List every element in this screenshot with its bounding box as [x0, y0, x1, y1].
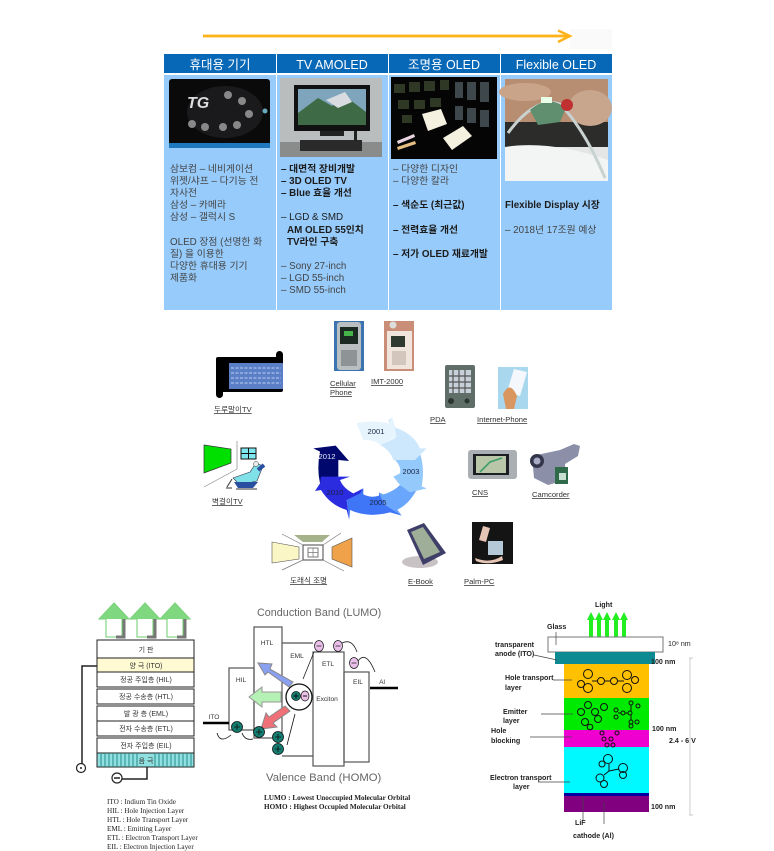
text: portable devices description: 질) 을 이용한 — [170, 248, 224, 260]
icon: light arrows — [587, 612, 628, 637]
labels: layer names: layer — [505, 684, 522, 692]
text: TV AMOLED description: – LGD 55-inch — [281, 273, 344, 284]
chart: band boxes — [203, 627, 398, 766]
legend: layer abbreviations: ITO : Indium Tin Oxide — [107, 798, 176, 806]
label: cycle years: 2003 — [403, 467, 419, 476]
text: portable devices description: 제품화 — [170, 272, 197, 284]
text: lighting OLED description: – 전력효율 개선 — [393, 223, 458, 236]
column: lighting OLED: 조명용 OLED — [408, 58, 480, 72]
icon: electron transport molecule — [596, 754, 628, 788]
photo: car navigation system — [468, 450, 517, 497]
icon: wall-mounted TV: 벽걸이TV — [212, 496, 244, 506]
text: TV AMOLED description: – SMD 55-inch — [281, 285, 346, 296]
text: TV AMOLED description: – Sony 27-inch — [281, 261, 346, 272]
photo: cellular phone: Cellular — [330, 379, 356, 388]
photo: e-book: E-Book — [408, 577, 433, 586]
image: tablet device: TG — [187, 95, 209, 112]
icon: leader lines — [530, 632, 693, 824]
text: TV AMOLED description: – Blue 효율 개선 — [281, 186, 352, 199]
chart: device layers: 전자 수송층 (ETL) — [119, 724, 173, 733]
chart: device layers: 양 극 (ITO) — [130, 662, 162, 670]
label: cycle years: 2012 — [319, 452, 335, 461]
text: lighting OLED description: – 다양한 디자인 — [393, 163, 458, 175]
text: band labels: HTL — [261, 640, 274, 647]
layer: aluminum cathode — [564, 796, 649, 812]
photo: PDA: PDA — [430, 415, 447, 424]
chart: circular year arrows — [313, 418, 427, 520]
arrow: 2002 segment — [380, 418, 427, 460]
chart: device layers: 음 극 — [139, 757, 154, 765]
panel: OLED application table — [164, 54, 612, 310]
photo: IMT-2000 phone — [371, 321, 414, 386]
text: band labels: Al — [379, 679, 385, 686]
arrow: 2003 segment — [393, 453, 427, 492]
photo: PDA — [430, 365, 475, 424]
text: lighting OLED description: – 색순도 (최근값) — [393, 198, 464, 211]
layer: LiF — [564, 793, 649, 796]
photo: palm PC — [464, 522, 513, 586]
photo: palm PC: Palm-PC — [464, 577, 495, 586]
text: band labels: ETL — [322, 661, 334, 668]
legend: layer abbreviations: EIL : Electron Injection Layer — [107, 843, 194, 851]
diagram: OLED layer stack — [76, 603, 200, 851]
labels: layer names: layer — [513, 783, 530, 791]
label: cycle years: 2005 — [370, 498, 386, 507]
text: lighting OLED description — [393, 163, 488, 260]
text: band labels: EIL — [353, 679, 363, 686]
heading: conduction band: Conduction Band (LUMO) — [257, 607, 381, 619]
diagram: OLED roadmap cycle — [204, 321, 580, 586]
chart: device layers: 기 판 — [139, 645, 154, 654]
photo: internet phone: Internet-Phone — [477, 415, 527, 424]
icon: anode wire and terminal — [76, 666, 97, 772]
layer: ITO anode — [555, 652, 655, 664]
legend: layer abbreviations: ETL : Electron Transport Layer — [107, 834, 198, 842]
icon: hole blocking molecule — [600, 731, 619, 747]
photo: camcorder: Camcorder — [532, 490, 570, 499]
photo: cellular phone: Phone — [330, 388, 352, 397]
text: band labels: Exciton — [316, 696, 338, 703]
chart: device layers: 정공 주입층 (HIL) — [120, 675, 172, 684]
legend: orbital abbreviations: HOMO : Highest Occupied Molecular Orbital — [264, 803, 406, 811]
layer: emitter — [564, 698, 649, 730]
photo: camcorder — [530, 444, 580, 499]
photo: e-book — [402, 523, 446, 586]
chart: device layers: 정공 수송층 (HTL) — [119, 692, 173, 701]
labels: layer names: blocking — [491, 737, 520, 745]
chart: device layers: 발 광 층 (EML) — [124, 709, 168, 718]
text: flexible OLED description — [505, 199, 600, 236]
icon: rollable TV — [214, 351, 283, 414]
labels: thickness and voltage: 100 nm — [652, 725, 676, 733]
icon: exciton pair — [286, 684, 312, 710]
text: portable devices description: 삼보컴 – 네비게이션 — [170, 163, 253, 175]
text: TV AMOLED description: – 3D OLED TV — [281, 176, 347, 187]
image: OLED television — [280, 78, 382, 157]
labels: layer names: Emitter — [503, 708, 528, 716]
icon: emitter molecules — [578, 701, 640, 730]
image: flexible display in hand — [499, 79, 612, 181]
labels: layer names: anode (ITO) — [495, 650, 535, 658]
text: TV AMOLED description: TV라인 구축 — [287, 236, 338, 248]
text: lighting OLED description: – 다양한 칼라 — [393, 175, 449, 187]
layer: electron transport — [564, 747, 649, 793]
legend: layer abbreviations: HIL : Hole Injection Layer — [107, 807, 185, 815]
text: band labels: HIL — [236, 677, 246, 684]
text: lighting OLED description: – 저가 OLED 재료개발 — [393, 247, 488, 260]
legend: layer abbreviations: HTL : Hole Transport Layer — [107, 816, 189, 824]
label: cycle years — [319, 427, 419, 507]
arrow: 2010 segment — [315, 477, 363, 520]
arrow: green emission — [249, 687, 281, 707]
label: cycle years: 2010 — [327, 488, 343, 497]
icon: holes — [217, 714, 295, 754]
text: TV AMOLED description: – 대면적 장비개발 — [281, 162, 355, 175]
text: portable devices description: 자사전 — [170, 187, 197, 199]
labels: thickness and voltage: 100 nm — [651, 803, 675, 811]
legend: orbital abbreviations: LUMO : Lowest Unoccupied Molecular Orbital — [264, 794, 410, 802]
column: portable devices — [164, 54, 276, 310]
text: TV AMOLED description: AM OLED 55인치 — [287, 224, 364, 236]
text: TV AMOLED description: – LGD & SMD — [281, 212, 343, 223]
layer: hole blocking — [564, 730, 649, 747]
chart: device layers — [97, 640, 194, 767]
column: TV AMOLED: TV AMOLED — [296, 58, 368, 72]
icon: wall-mounted TV — [204, 441, 264, 506]
heading: valence band: Valence Band (HOMO) — [266, 772, 382, 784]
text: band labels: ITO — [209, 714, 219, 721]
column: TV AMOLED — [277, 54, 388, 310]
labels: thickness and voltage: 10⁸ nm — [668, 640, 691, 648]
labels: layer names: transparent — [495, 641, 535, 649]
icon: rollable TV: 두루말이TV — [214, 404, 253, 414]
arrow: 2004 segment — [379, 485, 427, 516]
image: OLED lighting room — [391, 77, 497, 159]
icon: electrons — [303, 640, 375, 679]
diagram: OLED device cross-section — [490, 601, 696, 840]
text: band labels — [209, 640, 385, 721]
text: portable devices description: 삼성 – 카메라 — [170, 199, 226, 211]
text: portable devices description: OLED 장점 (선명한 화 — [170, 236, 262, 248]
icon: dome lighting — [272, 533, 352, 585]
labels: layer names — [490, 623, 615, 840]
icon: emitted light arrows — [99, 603, 190, 637]
labels: thickness and voltage — [651, 640, 696, 811]
column: Flexible OLED: Flexible OLED — [516, 58, 596, 72]
icon: dome lighting: 도래식 조명 — [290, 575, 327, 585]
layer: hole transport — [564, 664, 649, 698]
labels: layer names: layer — [503, 717, 520, 725]
legend: layer abbreviations: EML : Emitting Layer — [107, 825, 172, 833]
label: light: Light — [595, 601, 613, 609]
text: portable devices description: 위젯/샤프 – 다기능 전 — [170, 174, 258, 187]
labels: layer names: Glass — [547, 623, 566, 631]
image: tablet device — [169, 79, 270, 148]
diagram: energy band — [203, 607, 412, 811]
layer: glass — [548, 637, 663, 652]
text: band labels: EML — [290, 653, 304, 660]
labels: thickness and voltage: 100 nm — [651, 658, 675, 666]
labels: thickness and voltage: 2.4 - 6 V — [669, 737, 696, 745]
text: flexible OLED description: – 2018년 17조원 예상 — [505, 224, 596, 236]
column: Flexible OLED — [499, 54, 612, 310]
photo: car navigation system: CNS — [472, 488, 488, 497]
column: portable devices: 휴대용 기기 — [190, 58, 250, 72]
column: lighting OLED — [389, 54, 500, 310]
arrow: 2012 segment — [313, 446, 349, 483]
chart: device layers: 전자 주입층 (EIL) — [120, 741, 172, 750]
arrow: timeline — [203, 30, 570, 42]
arrow: 2001 segment — [357, 418, 397, 445]
text: flexible OLED description: Flexible Display 시장 — [505, 199, 600, 211]
photo: cellular phone — [330, 321, 364, 397]
labels: layer names: cathode (Al) — [573, 832, 615, 840]
labels: layer names: Electron transport — [490, 774, 552, 782]
labels: layer names: Hole transport — [505, 674, 554, 682]
text: portable devices description: 삼성 – 갤럭시 S — [170, 211, 236, 223]
label: cycle years: 2001 — [368, 427, 384, 436]
labels: layer names: LiF — [575, 819, 586, 827]
photo: IMT-2000 phone: IMT-2000 — [371, 377, 403, 386]
photo: internet phone — [477, 367, 528, 424]
arrow: red emission — [261, 706, 290, 729]
icon: hole transport molecule — [578, 670, 638, 692]
arrow: blue emission — [258, 663, 293, 687]
labels: layer names: Hole — [491, 727, 506, 735]
text: portable devices description: 다양한 휴대용 기기 — [170, 260, 248, 272]
icon: cathode wire and terminal — [112, 767, 147, 783]
arrow: 2005 segment — [347, 488, 402, 519]
